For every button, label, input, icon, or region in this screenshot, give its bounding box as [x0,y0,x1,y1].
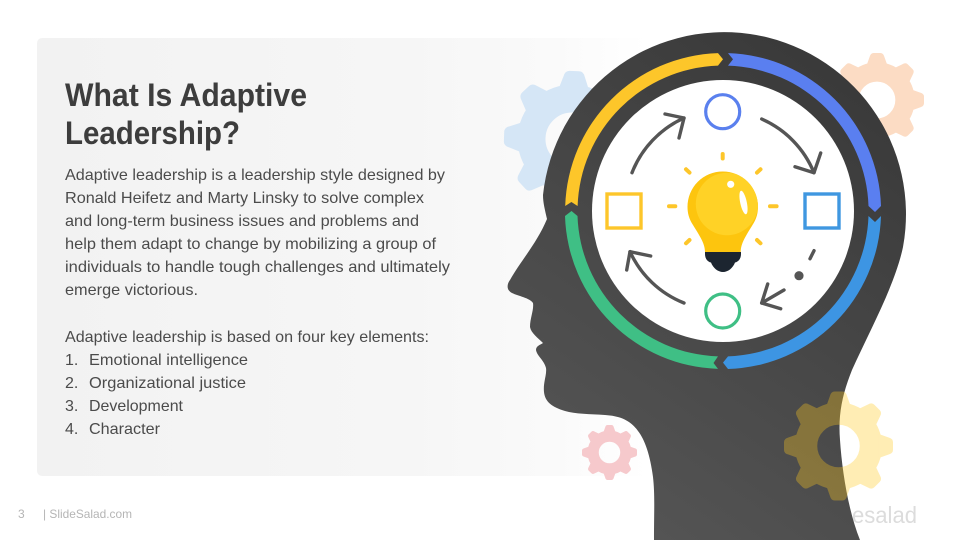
text block: four key elements list [65,329,429,438]
title: Leadership? [65,115,240,151]
text block: definition paragraph: and long-term business issues and problems and [65,213,419,230]
bulb base [705,252,741,272]
text block: definition paragraph: help them adapt to change by mobilizing a group of [65,236,437,253]
white inner circle [592,80,854,342]
text block: four key elements list: 3. [65,398,78,415]
icon: peach gear [830,53,924,147]
ring segment: yellow [565,53,723,206]
text block: four key elements list: 4. [65,421,78,438]
icon: blue square node [805,194,839,228]
title [65,77,307,151]
icon: blue circle node [706,95,740,129]
icon: blue gear [502,69,642,209]
title: What Is Adaptive [65,77,307,113]
footer page number: 3 [18,507,25,521]
arrow: left to top [632,114,684,173]
footer source: | SlideSalad.com [43,507,132,521]
text block: four key elements list: Character [89,421,161,438]
icon: yellow gear [784,392,893,500]
bulb glint streak [738,190,749,215]
text block: definition paragraph: individuals to handle tough challenges and ultimately [65,259,450,276]
text block: definition paragraph: Adaptive leadership is a leadership style designed by [65,167,445,184]
text block: four key elements list: 1. [65,352,78,369]
bulb glass [688,171,758,252]
bulb glass highlight [696,173,758,235]
text block: four key elements list: Organizational justice [89,375,246,392]
segmented ring [565,53,881,369]
icon: light bulb [669,154,777,272]
arrow: top to right [762,119,821,173]
text block: definition paragraph: emerge victorious. [65,282,198,299]
arrow: bottom to left [627,252,684,303]
icon: pink gear [582,425,637,480]
head silhouette [508,32,906,540]
ring segment: sky blue [723,216,881,369]
ring segment: indigo blue [728,53,881,212]
text block: definition paragraph: Ronald Heifetz and Marty Linsky to solve complex [65,190,424,207]
watermark: esalad [852,502,917,528]
icon: yellow square node [607,194,641,228]
text block: four key elements list: Emotional intelligence [89,352,248,369]
ring segment: green [565,211,718,369]
panel: text background [37,38,647,476]
bulb glint dot [727,181,734,188]
text block: definition paragraph [65,167,450,299]
icon: green circle node [706,294,740,328]
text block: four key elements list: Development [89,398,184,415]
text block: four key elements list: 2. [65,375,78,392]
text block: four key elements list: Adaptive leadership is based on four key elements: [65,329,429,346]
arrow: right to bottom, broken [762,251,814,309]
bulb rays [669,154,777,243]
